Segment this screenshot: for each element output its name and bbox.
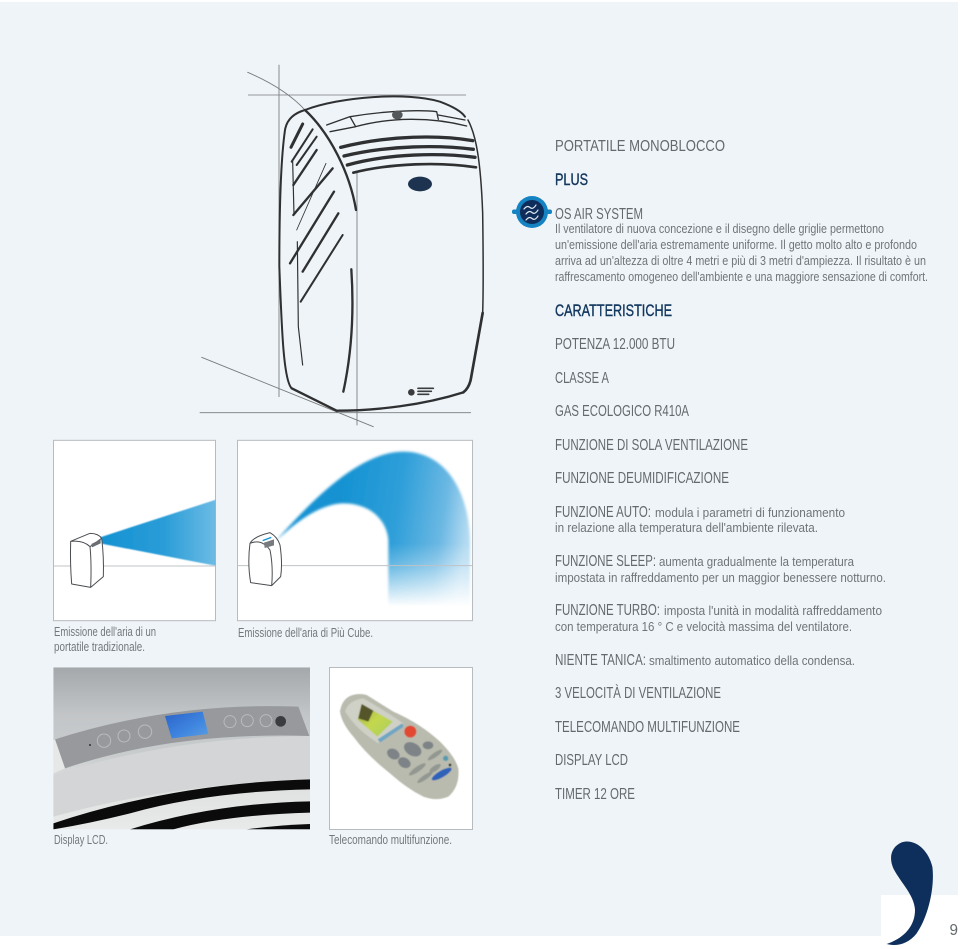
caption: traditional emission: Emissione dell'aria di un	[54, 625, 156, 639]
feature list: DISPLAY LCD	[555, 752, 628, 769]
feature list: smaltimento automatico della condensa.	[649, 653, 855, 668]
feature list: modula i parametri di funzionamento	[655, 505, 845, 520]
panel: traditional air emission diagram	[53, 440, 220, 621]
feature list: aumenta gradualmente la temperatura	[659, 554, 855, 569]
caption: remote control: Telecomando multifunzione.	[329, 833, 452, 847]
panel: remote control frame	[330, 668, 472, 830]
text block: os air system: OS AIR SYSTEM	[555, 206, 643, 223]
feature list: GAS ECOLOGICO R410A	[555, 403, 689, 420]
heading: plus: PLUS	[555, 171, 588, 189]
page corner: white tab and brand swoosh	[881, 842, 960, 949]
feature list: FUNZIONE DEUMIDIFICAZIONE	[555, 470, 729, 487]
feature list: FUNZIONE AUTO:	[555, 504, 651, 521]
feature list: FUNZIONE TURBO:	[555, 602, 660, 619]
feature list: impostata in raffreddamento per un maggior benessere notturno.	[555, 570, 886, 585]
feature list: POTENZA 12.000 BTU	[555, 336, 675, 353]
caption: traditional emission	[54, 625, 156, 654]
heading: portatile monoblocco: PORTATILE MONOBLOCCO	[555, 138, 725, 155]
feature list: TELECOMANDO MULTIFUNZIONE	[555, 719, 740, 736]
feature list: con temperatura 16 ° C e velocità massima del ventilatore.	[555, 619, 852, 634]
feature list: TIMER 12 ORE	[555, 786, 635, 803]
feature list: in relazione alla temperatura dell'ambiente rilevata.	[555, 520, 818, 535]
caption: piu cube emission: Emissione dell'aria di Più Cube.	[238, 626, 373, 640]
feature list: NIENTE TANICA:	[555, 652, 646, 669]
page number: 9	[950, 922, 958, 939]
caption: traditional emission: portatile tradizionale.	[54, 640, 145, 654]
panel: piu cube air emission diagram	[237, 440, 472, 621]
icon: air flow badge	[512, 196, 552, 228]
caption: display lcd: Display LCD.	[54, 833, 108, 847]
feature list: FUNZIONE SLEEP:	[555, 553, 656, 570]
text block: os air system	[555, 206, 928, 284]
text block: os air system: Il ventilatore di nuova concezione e il disegno delle griglie permettono	[555, 221, 884, 236]
heading: caratteristiche: CARATTERISTICHE	[555, 302, 672, 320]
feature list: imposta l'unità in modalità raffreddamento	[664, 603, 882, 618]
photo: lcd display close-up	[53, 667, 310, 829]
feature list	[555, 336, 886, 803]
feature list: 3 VELOCITÀ DI VENTILAZIONE	[555, 685, 721, 702]
feature list: CLASSE A	[555, 370, 609, 387]
feature list: FUNZIONE DI SOLA VENTILAZIONE	[555, 437, 748, 454]
sketch: portable air conditioner with construction lines	[200, 65, 483, 427]
photo: remote control	[340, 694, 459, 799]
